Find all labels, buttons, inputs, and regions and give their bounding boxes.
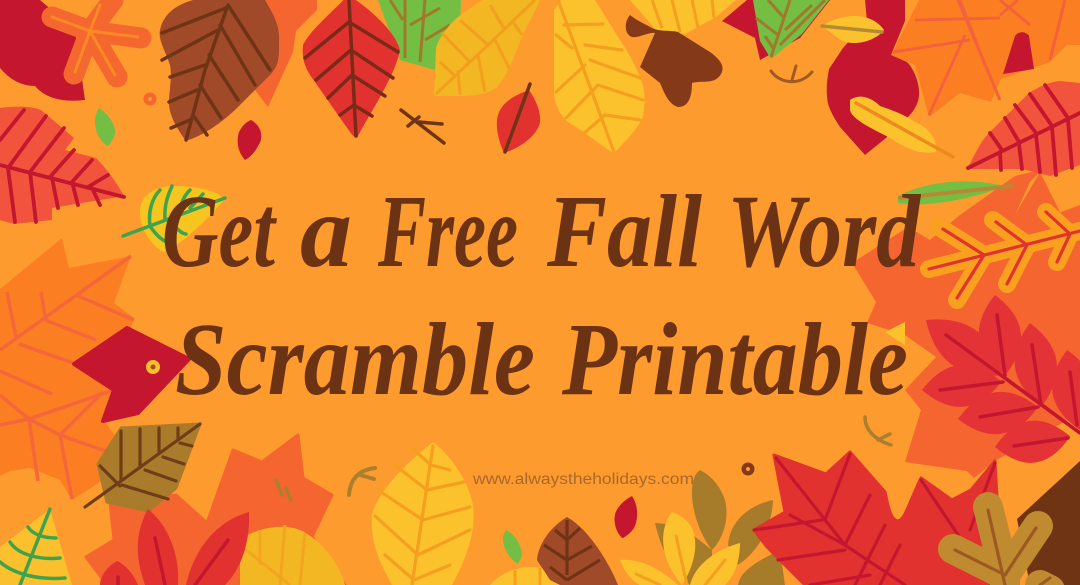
leaf: yellow top centre-right xyxy=(630,0,736,34)
leaf: small yellow top right xyxy=(822,16,884,43)
icon: twig xyxy=(401,110,444,143)
icon: squiggle olive right xyxy=(865,417,891,445)
leaf: big yellow top centre xyxy=(554,0,644,153)
leaf: orange oak right xyxy=(929,212,1080,300)
leaf: red top xyxy=(303,0,400,136)
title: Free xyxy=(377,174,518,289)
leaf: yellow bottom xyxy=(240,525,345,585)
leaf: brown bottom xyxy=(537,517,618,585)
leaf: small crimson bottom xyxy=(615,496,637,538)
icon: small marks on maple xyxy=(276,480,291,500)
leaf: red maple bottom right xyxy=(754,452,1000,585)
leaf: orange-red maple right xyxy=(852,170,1080,478)
leaf: crimson arrow xyxy=(74,328,189,421)
leaf: red left xyxy=(0,107,124,224)
leaf cluster: olive and yellow plant xyxy=(620,470,785,585)
leaf: small green xyxy=(95,108,115,146)
leaf: dark brown right xyxy=(1017,461,1080,585)
leaf: orange maple top right xyxy=(891,0,1080,117)
leaf branch: red right xyxy=(914,292,1080,468)
icon: dark ring xyxy=(742,462,754,476)
leaf: brown top xyxy=(160,0,279,141)
icon: squiggle olive xyxy=(349,468,375,495)
leaf: orange oak top-left xyxy=(52,0,141,77)
leaf: orange maple bottom-left xyxy=(86,435,345,585)
leaf: small red with stem xyxy=(497,84,540,153)
website credit: www.alwaystheholidays.com xyxy=(472,471,694,488)
leaf: yellow top xyxy=(434,0,540,96)
leaf: small crimson xyxy=(238,120,261,160)
leaf: small yellow behind title xyxy=(885,322,905,345)
leaf: orange bg notch right xyxy=(1012,160,1080,230)
leaf: red right top xyxy=(967,81,1080,176)
leaf: small green bottom xyxy=(503,530,522,564)
leaf: big orange left xyxy=(0,238,134,500)
leaf: crimson small top right xyxy=(1003,32,1034,74)
leaf: yellow feather xyxy=(850,97,953,157)
icon: orange ring xyxy=(144,92,156,106)
title: a xyxy=(300,174,352,289)
title xyxy=(162,174,922,417)
leaf: brown-gold xyxy=(85,424,200,511)
title: Printable xyxy=(561,302,908,417)
leaf: brown oak xyxy=(626,15,723,107)
leaf: long green right xyxy=(898,181,1012,204)
leaf: crimson large top right xyxy=(827,0,919,155)
leaf: green top xyxy=(378,0,461,70)
leaf: gold oak xyxy=(953,507,1050,585)
leaf: yellow and green bottom-left xyxy=(0,509,72,585)
leaf: green top right xyxy=(753,0,829,59)
leaf: red trio bottom-left xyxy=(100,509,249,585)
leaf: big yellow bottom xyxy=(372,442,474,585)
leaf: orange behind brown leaf xyxy=(255,0,317,107)
leaf: yellow bottom centre xyxy=(490,567,578,585)
leaf: crimson blob top-left xyxy=(0,0,85,101)
leaf: yellow and green behind title xyxy=(123,186,225,252)
title: Fall xyxy=(546,174,702,289)
leaf: crimson top xyxy=(722,0,830,60)
icon: small twig top right xyxy=(771,66,812,82)
title: Scramble xyxy=(175,302,535,417)
title: Word xyxy=(727,174,922,289)
title: Get xyxy=(162,174,277,289)
